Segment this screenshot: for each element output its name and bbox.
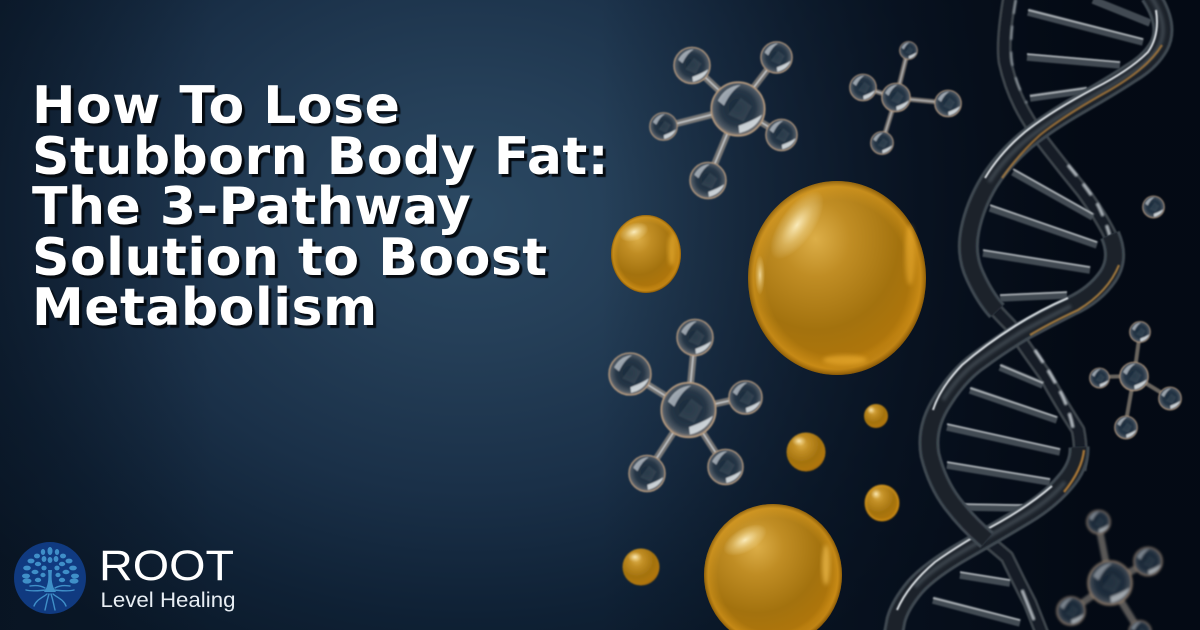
molecule: top left large [650,42,797,199]
DNA back strands [967,0,1115,630]
gold droplet: large centre [748,181,926,375]
DNA rungs [933,0,1150,623]
small glass bubble [1142,196,1165,218]
logo wordmark: ROOT: ROOT [99,542,234,590]
title: Solution to Boost [32,228,548,288]
title: How To Lose [32,76,400,136]
title: The 3-Pathway [32,177,471,237]
molecule: middle left [609,319,762,492]
title: Metabolism [32,278,378,338]
logo tagline: Level Healing: Level Healing [100,589,236,612]
gold droplet: left [611,215,681,293]
gold droplet: small right [864,484,900,522]
molecule: bottom right [1057,510,1162,630]
logo icon: tree in circle [14,542,86,614]
DNA front strand A [893,0,1163,630]
gold droplet: small bottom left [622,548,660,586]
title: Stubborn Body Fat: [32,127,609,187]
gold droplet: small centre [786,432,826,472]
title [32,76,609,338]
gold droplet: bottom large [704,504,842,630]
DNA front strand B [929,235,1119,540]
molecule: top right [850,41,961,155]
molecule: right middle [1089,321,1182,439]
DNA helix [893,0,1163,630]
logo [14,542,236,614]
gold droplet: tiny [864,404,888,428]
